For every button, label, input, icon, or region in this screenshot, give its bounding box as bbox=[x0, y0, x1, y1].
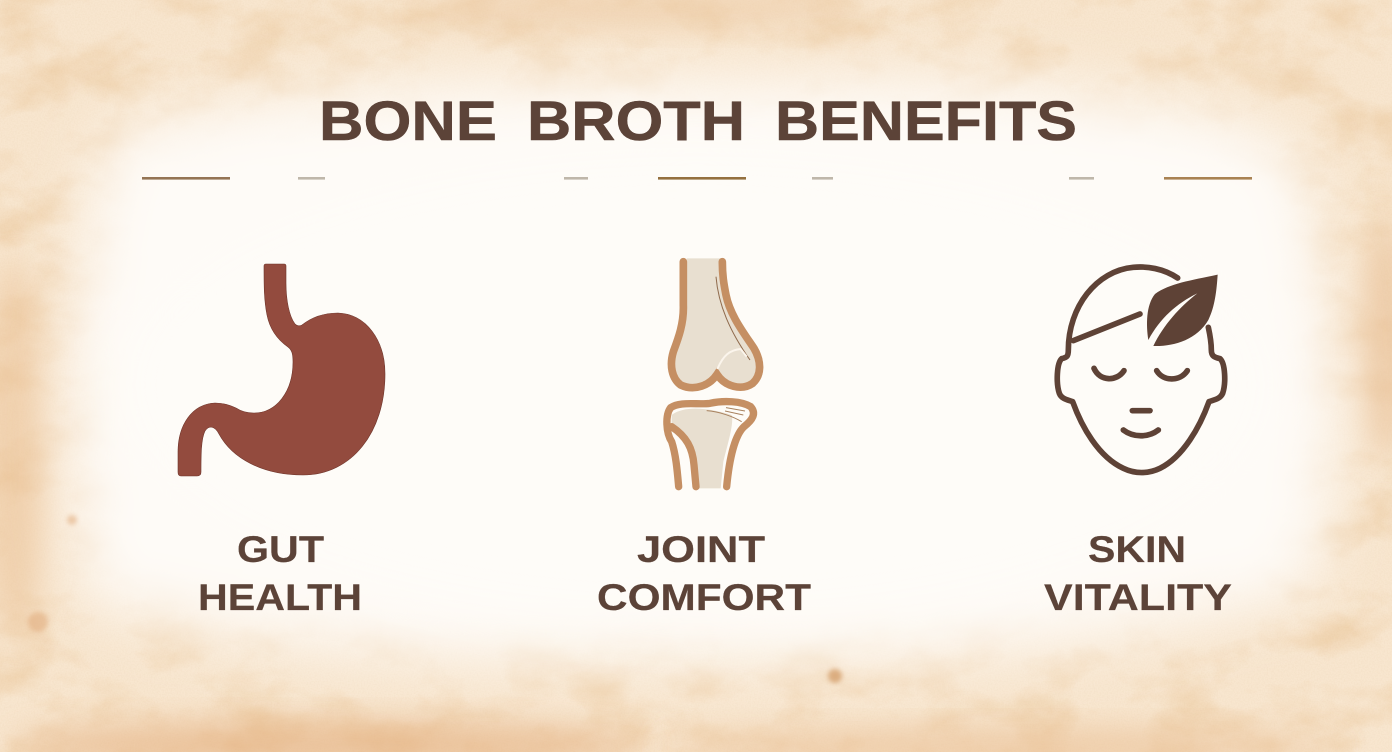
icon: stomach bbox=[178, 264, 385, 476]
label: joint comfort bbox=[597, 529, 811, 618]
label: skin vitality: VITALITY bbox=[1044, 577, 1232, 618]
lower bone fill bbox=[672, 409, 732, 488]
label: joint comfort: COMFORT bbox=[597, 577, 811, 618]
label: gut health: GUT bbox=[237, 529, 324, 570]
title: BENEFITS bbox=[775, 89, 1077, 152]
divider row bbox=[142, 177, 1252, 180]
joint highlight bbox=[717, 349, 747, 369]
upper bone detail bbox=[716, 277, 750, 360]
upper bone outline bbox=[671, 262, 760, 388]
title: BROTH bbox=[527, 89, 745, 152]
label: joint comfort: JOINT bbox=[637, 529, 765, 570]
label: gut health bbox=[198, 529, 362, 618]
mouth bbox=[1123, 430, 1158, 436]
right eye bbox=[1157, 371, 1187, 379]
title: BONE bbox=[319, 89, 497, 152]
label: skin vitality: SKIN bbox=[1088, 529, 1186, 570]
hair line bbox=[1073, 314, 1140, 341]
lower bone outline bbox=[667, 402, 754, 487]
icon: face with leaf bbox=[1057, 267, 1225, 473]
lower bone detail bbox=[707, 408, 745, 422]
nose bbox=[1132, 402, 1150, 419]
upper bone fill bbox=[674, 258, 757, 385]
label: gut health: HEALTH bbox=[198, 577, 362, 618]
left eye bbox=[1094, 368, 1124, 379]
head outline bbox=[1057, 267, 1225, 473]
label: skin vitality bbox=[1044, 529, 1232, 618]
leaf bbox=[1147, 275, 1218, 346]
icon: knee joint bbox=[667, 258, 760, 488]
title bbox=[319, 89, 1077, 152]
